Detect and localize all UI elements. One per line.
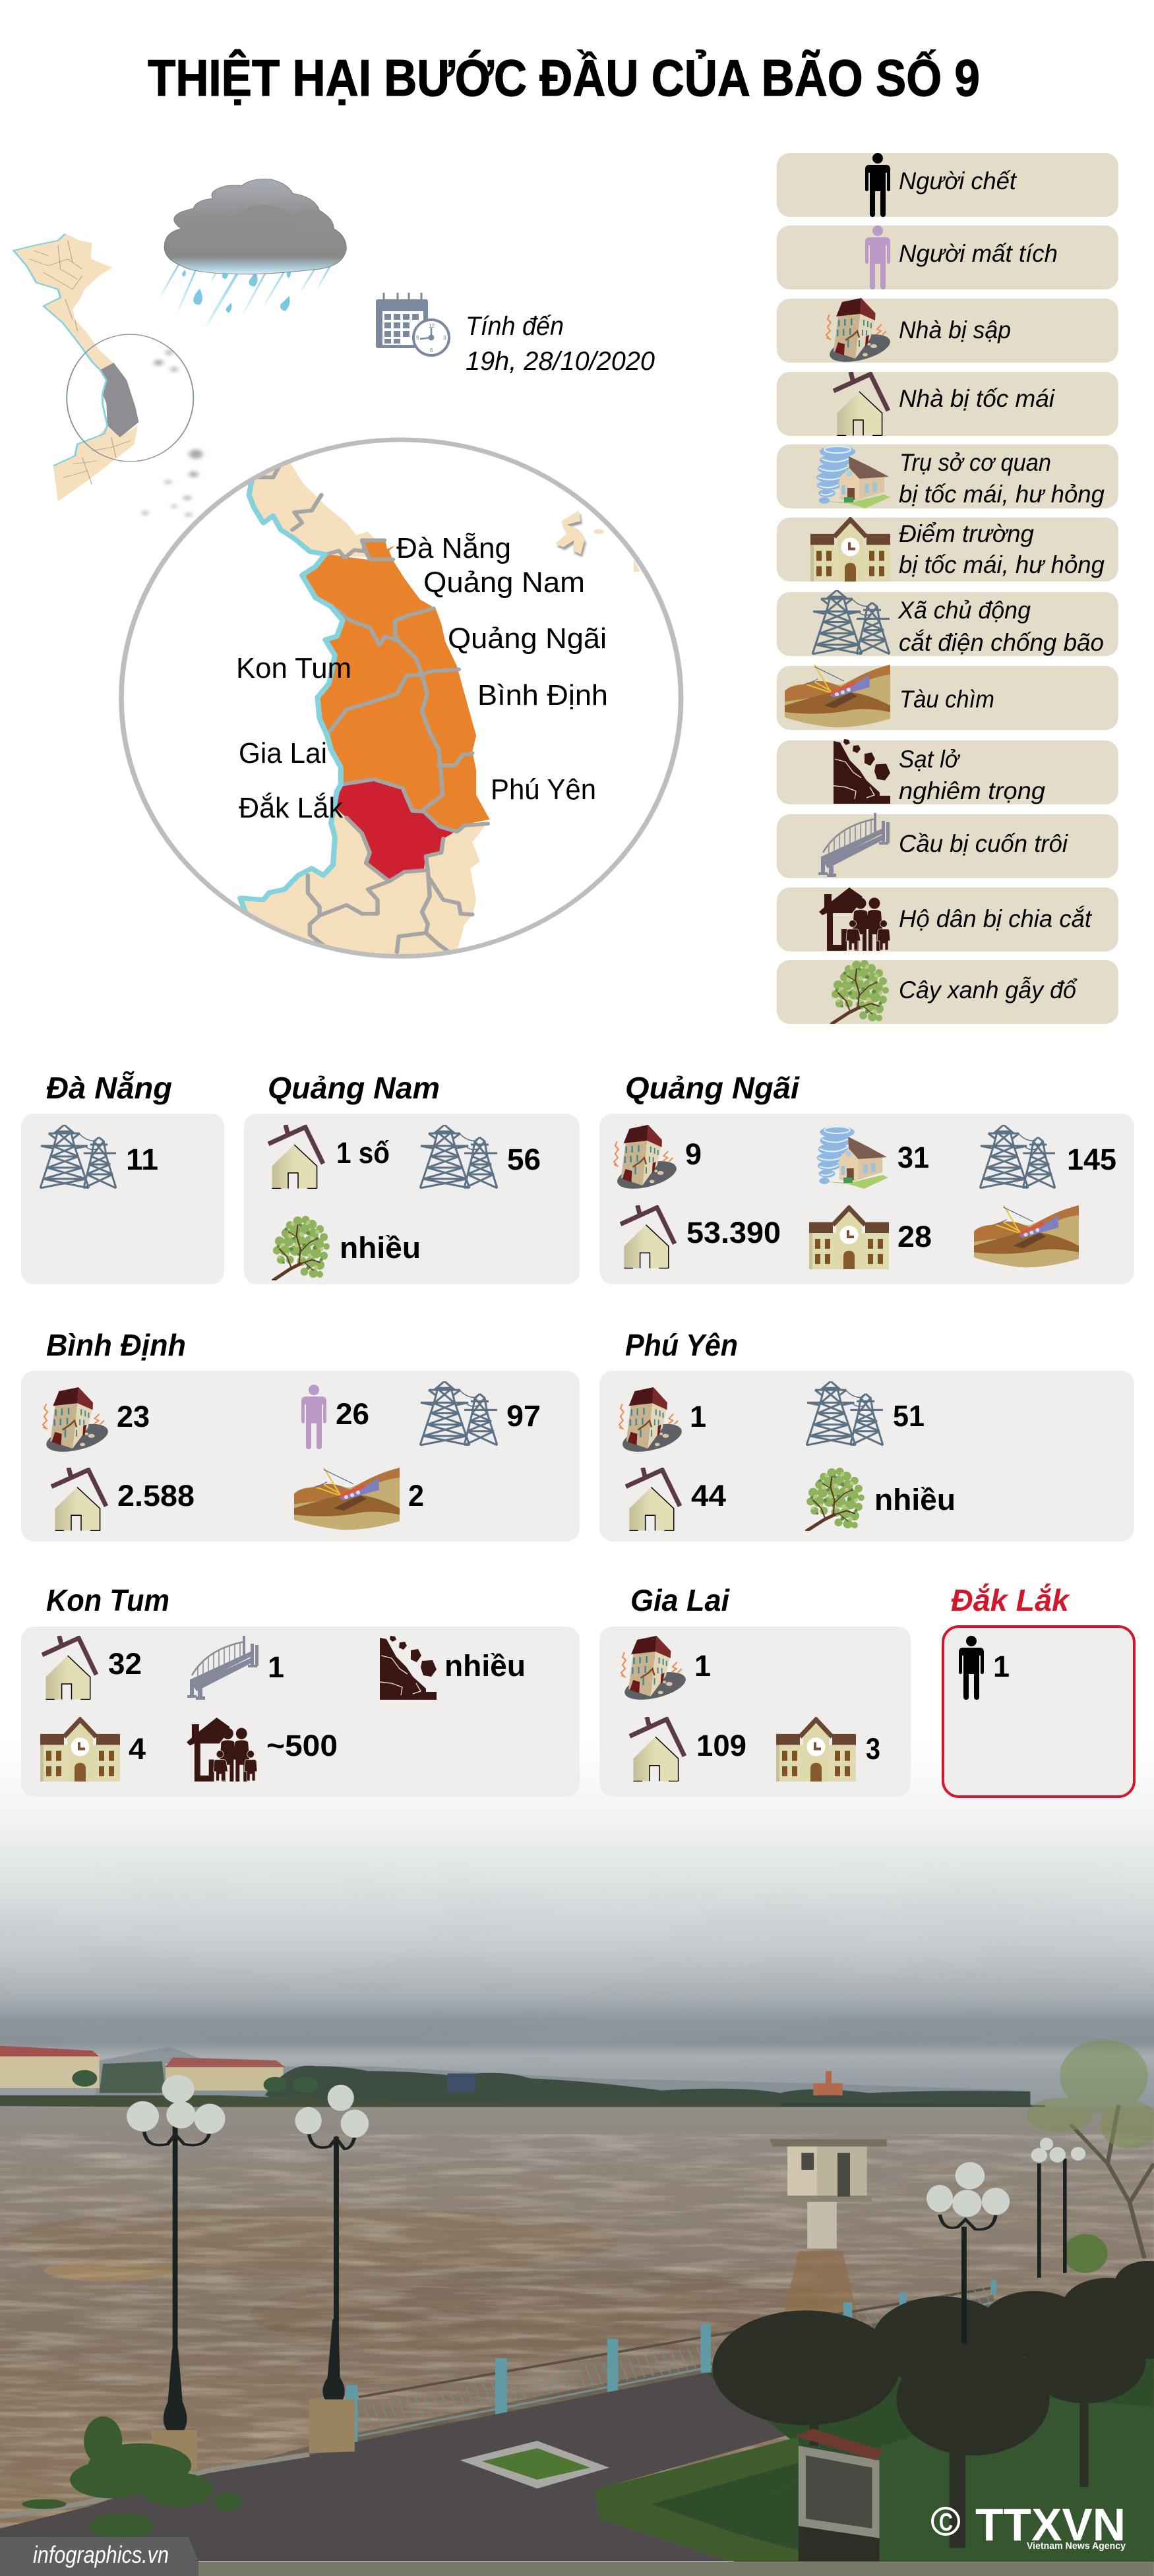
offshore islands	[142, 350, 202, 517]
map outline circle	[121, 440, 681, 956]
stat: offices 31	[817, 1126, 929, 1189]
stat: unroofed 53.390: 53.390	[686, 1216, 781, 1249]
logo: TTXVN: Vietnam News Agency	[1027, 2540, 1126, 2552]
stat: towers 97	[420, 1381, 541, 1445]
province borders	[29, 241, 131, 485]
stat: unroofed 32: 32	[108, 1647, 142, 1681]
legend: collapsed houses: Nhà bị sập	[899, 316, 1011, 344]
hedge	[595, 2437, 839, 2561]
map labels: Quảng Nam	[423, 566, 585, 599]
stat: schools 4	[40, 1720, 146, 1782]
footer tab: infographics.vn	[0, 2537, 198, 2576]
date text: Tính đến	[466, 312, 564, 341]
stat: offices 31: 31	[897, 1141, 929, 1174]
legend: missing: Người mất tích	[899, 240, 1058, 267]
panel: Quang Nam	[244, 1071, 580, 1284]
panel: Quang Ngai: Quảng Ngãi	[625, 1071, 800, 1105]
legend: isolated households	[819, 887, 1093, 951]
utility box	[795, 2429, 883, 2561]
stat: missing 26	[301, 1385, 369, 1449]
stat: towers 145	[980, 1125, 1116, 1188]
stat: collapsed 1: 1	[694, 1649, 711, 1683]
panel: Gia Lai	[599, 1583, 911, 1797]
stat: collapsed 9: 9	[685, 1137, 702, 1171]
map land and regions	[240, 460, 490, 959]
panel: Gia Lai: Gia Lai	[630, 1583, 730, 1617]
map labels: Kon Tum	[236, 652, 351, 684]
stat: ships 2: 2	[408, 1479, 424, 1513]
stat: towers 11: 11	[126, 1143, 158, 1176]
curb	[0, 2455, 309, 2516]
panel: Da Nang	[21, 1071, 224, 1284]
legend: power cut	[812, 590, 1104, 656]
stat: schools 28: 28	[897, 1220, 932, 1253]
logo: TTXVN: C	[939, 2509, 953, 2536]
logo: TTXVN: TTXVN	[975, 2499, 1126, 2550]
stat: collapsed 1	[621, 1636, 711, 1705]
legend: dead	[865, 153, 1017, 217]
map labels: Đà Nẵng	[396, 532, 511, 564]
legend	[777, 153, 1118, 1024]
kiosk in the water	[770, 2139, 887, 2249]
stat: unroofed 2.588	[51, 1468, 195, 1531]
stat: unroofed 109	[630, 1717, 746, 1781]
shrub at lower left	[22, 2416, 243, 2538]
map labels	[236, 532, 608, 824]
title: THIỆT HẠI BƯỚC ĐẦU CỦA BÃO SỐ 9	[148, 49, 980, 107]
stat: towers 97: 97	[506, 1399, 541, 1433]
stat: schools 28	[809, 1208, 932, 1269]
date text: 19h, 28/10/2020	[466, 347, 655, 376]
far bank with buildings and trees	[0, 2046, 1045, 2117]
stat: unroofed some: 1 số	[336, 1136, 390, 1170]
icon: calendar and clock: 6	[430, 347, 433, 353]
panel: Phu Yen	[599, 1328, 1134, 1542]
icon: calendar and clock: 12	[429, 323, 435, 329]
legend card backgrounds	[777, 153, 1118, 1024]
southern land	[53, 425, 138, 501]
map labels: Bình Định	[477, 679, 608, 711]
stat: unroofed some	[268, 1125, 390, 1188]
legend: dead: Người chết	[899, 167, 1017, 195]
panel: Quang Nam: Quảng Nam	[268, 1071, 440, 1105]
red Dak Lak province	[335, 781, 454, 881]
stat: bridge 1	[187, 1636, 284, 1700]
green planting pad	[460, 2441, 609, 2488]
panel: Dak Lak highlighted: Đắk Lắk	[951, 1583, 1070, 1617]
locator circle	[67, 334, 193, 462]
lit grass patch	[736, 2397, 1154, 2561]
northern and central land	[14, 234, 113, 370]
legend: power cut: cắt điện chống bão	[899, 629, 1104, 656]
cloud body	[164, 179, 346, 274]
stat: trees many: nhiều	[874, 1483, 956, 1516]
map labels: Đắk Lắk	[239, 792, 344, 824]
western border line	[240, 481, 343, 914]
legend: unroofed houses: Nhà bị tốc mái	[899, 385, 1056, 412]
legend: bridges: Cầu bị cuốn trôi	[899, 830, 1069, 857]
stat: sunken ship	[974, 1205, 1079, 1267]
icon: calendar and clock: 3	[443, 335, 446, 341]
stat: towers 51	[806, 1381, 925, 1445]
cloud puffs	[183, 204, 334, 250]
stat: dead 1: 1	[993, 1650, 1010, 1683]
legend: offices damaged: bị tốc mái, hư hỏng	[899, 481, 1105, 508]
stat: unroofed 32	[42, 1636, 142, 1700]
lawn	[633, 2349, 1154, 2563]
legend: sunken ships: Tàu chìm	[899, 686, 994, 713]
date text	[466, 312, 655, 376]
zoomed map of affected provinces	[121, 440, 681, 959]
panel: Binh Dinh: Bình Định	[46, 1328, 186, 1362]
legend: sunken ships	[785, 665, 994, 727]
stat: schools 3: 3	[866, 1732, 880, 1766]
legend: fallen trees: Cây xanh gẫy đổ	[899, 976, 1078, 1003]
stat: towers 51: 51	[893, 1399, 925, 1433]
stat: towers 56: 56	[507, 1143, 541, 1176]
stat: collapsed 23	[43, 1387, 150, 1457]
icon: calendar and clock	[376, 293, 449, 355]
panel: Dak Lak highlighted	[943, 1583, 1134, 1797]
stat: trees many	[806, 1468, 956, 1531]
legend: bridges	[818, 813, 1069, 877]
stat: collapsed 1	[619, 1387, 706, 1457]
legend: landslides: nghiêm trọng	[899, 777, 1045, 804]
rain streaks	[160, 264, 331, 330]
stat: schools 4: 4	[129, 1732, 146, 1766]
map labels: Phú Yên	[491, 773, 596, 806]
legend: collapsed houses	[826, 298, 1011, 367]
legend: schools damaged	[810, 520, 1105, 582]
stat: collapsed 23: 23	[117, 1400, 150, 1433]
round topiary trees	[712, 2261, 1154, 2548]
stat: towers 56	[420, 1125, 541, 1188]
stat: trees many	[273, 1216, 421, 1280]
legend: unroofed houses	[834, 372, 1056, 435]
coast line	[14, 234, 107, 466]
grey highlighted central region	[100, 363, 138, 437]
river water	[0, 2107, 1154, 2545]
panel: Kon Tum	[21, 1583, 580, 1797]
bottom grey strip	[0, 2561, 1154, 2576]
raindrops	[182, 268, 291, 313]
stat: landslides many: nhiều	[444, 1649, 526, 1683]
stat: households about 500	[187, 1718, 338, 1782]
legend: schools damaged: Điểm trường	[899, 520, 1034, 547]
stat: towers 11	[40, 1125, 158, 1188]
stat: dead 1	[959, 1636, 1010, 1700]
panel: Da Nang: Đà Nẵng	[46, 1071, 172, 1105]
stat: unroofed 44: 44	[691, 1479, 726, 1513]
panel: Quang Ngai	[599, 1071, 1134, 1284]
footer tab: infographics.vn: infographics.vn	[33, 2541, 169, 2568]
legend: missing	[865, 225, 1058, 289]
stat: trees many: nhiều	[340, 1231, 421, 1265]
stat: collapsed 9	[614, 1125, 702, 1194]
stat: landslides many	[380, 1636, 526, 1700]
legend: offices damaged	[816, 446, 1105, 508]
photo: flooded river under storm sky	[0, 1741, 1154, 2576]
stat: towers 145: 145	[1067, 1143, 1116, 1176]
panel: Kon Tum: Kon Tum	[46, 1583, 169, 1617]
stat: unroofed 53.390	[621, 1205, 781, 1269]
legend: fallen trees	[832, 960, 1078, 1024]
stat: collapsed 1: 1	[690, 1400, 706, 1433]
stat: missing 26: 26	[336, 1397, 369, 1431]
legend: landslides	[834, 739, 1045, 804]
fence along the river	[250, 2280, 996, 2477]
lamp pedestals	[151, 2399, 355, 2470]
panel: Binh Dinh	[21, 1328, 580, 1542]
icon: rain cloud	[160, 179, 346, 330]
map labels: Quảng Ngãi	[448, 622, 607, 655]
stat: unroofed 44	[626, 1468, 726, 1531]
sky	[0, 1786, 1154, 2110]
stat: unroofed 109: 109	[696, 1729, 746, 1762]
stat: ships 2	[294, 1468, 424, 1530]
stat: unroofed 2.588: 2.588	[117, 1479, 195, 1513]
icon: calendar and clock: 9	[416, 335, 419, 341]
legend: landslides: Sạt lở	[899, 746, 960, 773]
orange affected provinces	[302, 554, 490, 831]
province borders	[260, 467, 488, 952]
mini map of Vietnam with locator circle	[14, 234, 202, 517]
bare tree at right	[1027, 2039, 1154, 2273]
legend: offices damaged: Trụ sở cơ quan	[899, 449, 1051, 476]
Hoang Sa islands	[555, 510, 640, 572]
legend: schools damaged: bị tốc mái, hư hỏng	[899, 551, 1105, 578]
stat: households about 500: ~500	[266, 1729, 338, 1762]
promenade pavement	[0, 2373, 802, 2561]
legend: power cut: Xã chủ động	[897, 597, 1031, 624]
stat: schools 3	[776, 1720, 880, 1782]
map labels: Gia Lai	[239, 737, 327, 769]
stat: bridge 1: 1	[268, 1650, 284, 1684]
legend: isolated households: Hộ dân bị chia cắt	[899, 905, 1093, 932]
panel: Phu Yen: Phú Yên	[625, 1328, 738, 1362]
street lamps	[127, 2075, 1085, 2432]
